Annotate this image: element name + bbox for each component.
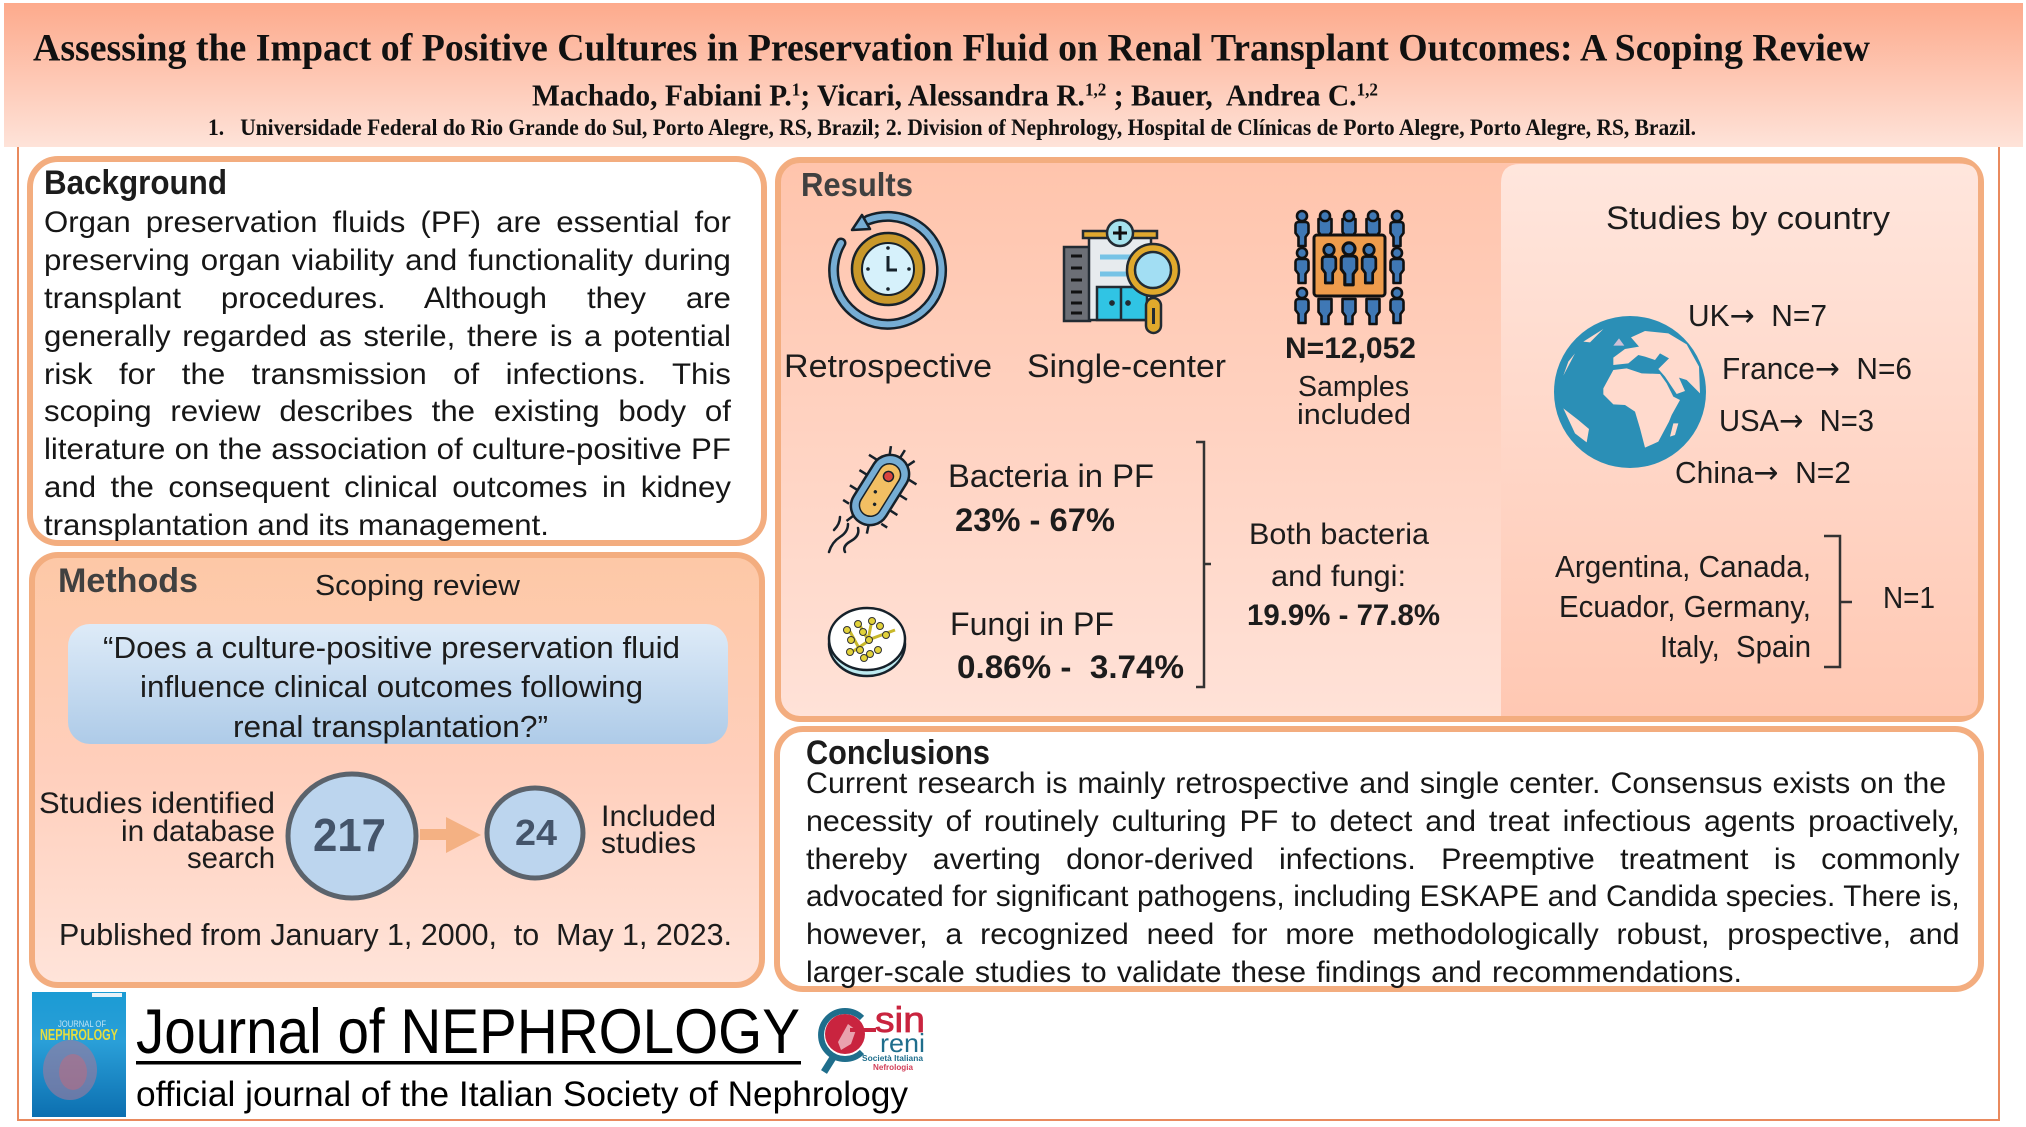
heading: conclusions: Conclusions — [806, 734, 990, 772]
journal cover — [32, 992, 126, 1117]
list: other countries — [1555, 549, 1811, 664]
authors: 1,2 — [1357, 80, 1378, 100]
stat: samples included — [1285, 332, 1416, 431]
label: fungi: 0.86% - 3.74% — [957, 649, 1184, 685]
journal subtitle: official journal of the Italian Society of Nephrology — [136, 1075, 908, 1114]
label: studies identified — [39, 787, 275, 875]
text block: conclusions: necessity of routinely culturing PF to detect and treat infectious agents proactively, — [806, 805, 1960, 838]
label: included studies — [601, 800, 716, 860]
text block: conclusions: advocated for significant pathogens, including ESKAPE and Candida species. There is, — [806, 880, 1960, 913]
title: Assessing the Impact of Positive Cultures in Preservation Fluid on Renal Transplant Outcomes: A Scoping Review — [33, 26, 1870, 70]
panel: results — [778, 160, 1981, 719]
icon: retrospective clock — [834, 215, 942, 324]
journal cover: JOURNAL OF — [58, 1019, 106, 1029]
text block: conclusions — [806, 765, 1976, 1005]
icon: globe — [1554, 316, 1706, 468]
logo: SIN Reni: reni — [880, 1028, 925, 1058]
authors: Machado, Fabiani P. — [532, 78, 805, 112]
text block: conclusions: however, a recognized need for more methodologically robust, prospective, and — [806, 918, 1960, 951]
label: bacteria — [948, 458, 1154, 538]
icon: people samples — [1296, 211, 1404, 324]
list: top countries: China→ N=2 — [1675, 455, 1851, 491]
label: included studies: studies — [601, 827, 696, 860]
logo: SIN Reni: sin — [875, 999, 925, 1040]
circle: 24 — [487, 788, 583, 878]
callout: research question: influence clinical outcomes following — [140, 669, 643, 704]
text block: conclusions: larger-scale studies to validate these findings and recommendations. — [806, 956, 1742, 989]
label: retrospective: Retrospective — [784, 348, 992, 384]
header banner — [4, 3, 2023, 147]
arrow — [420, 817, 481, 853]
text block: background: risk for the transmission of infections. This — [44, 358, 731, 390]
authors: 1 — [792, 80, 800, 100]
authors: ; Vicari, Alessandra R. — [800, 78, 1085, 112]
label: fungi: Fungi in PF — [950, 606, 1114, 642]
bracket: bacteria and fungi — [1196, 442, 1211, 687]
panel: studies by country — [1501, 164, 1978, 716]
heading: results: Results — [801, 166, 913, 203]
authors: ; Bauer, Andrea C. — [1106, 78, 1357, 112]
callout: research question: renal transplantation?” — [233, 709, 548, 744]
label: fungi — [950, 606, 1184, 685]
label: studies identified: Studies identified — [39, 787, 275, 820]
stat: samples included: included — [1297, 399, 1411, 431]
authors: 1,2 — [1085, 80, 1106, 100]
stat: both bacteria and fungi: Both bacteria — [1249, 518, 1429, 551]
logo: SIN Reni: Nefrologia — [873, 1063, 914, 1072]
label: studies identified: in database — [121, 815, 275, 848]
panel: conclusions — [777, 729, 1981, 1005]
journal cover: NEPHROLOGY — [40, 1027, 118, 1044]
stat: samples included: Samples — [1298, 371, 1409, 403]
logo: SIN Reni: Società Italiana — [862, 1054, 924, 1063]
label: bacteria: Bacteria in PF — [948, 458, 1154, 494]
text block: background: generally regarded as sterile, there is a potential — [44, 320, 731, 353]
list: other countries: Ecuador, Germany, — [1559, 589, 1811, 624]
list: top countries: France→ N=6 — [1722, 351, 1912, 387]
label: bacteria: 23% - 67% — [955, 502, 1115, 538]
label: N=1: N=1 — [1883, 580, 1935, 615]
logo: SIN Reni — [821, 999, 925, 1072]
list: top countries: USA→ N=3 — [1719, 403, 1874, 439]
journal name: Journal of NEPHROLOGY — [136, 997, 800, 1067]
text block: conclusions: Current research is mainly retrospective and single center. Consensus exists on the — [806, 767, 1946, 800]
affiliations: 1. Universidade Federal do Rio Grande do Sul, Porto Alegre, RS, Brazil; 2. Division of Nephrology, Hospital de Clínicas de Porto Alegre, Porto Alegre, RS, Brazil. — [208, 115, 1696, 140]
panel: methods — [32, 555, 762, 985]
text block: background: and the consequent clinical outcomes in kidney — [44, 471, 731, 504]
stat: samples included: N=12,052 — [1285, 332, 1416, 365]
icon: single-center hospital — [1064, 220, 1179, 333]
text block: background: transplant procedures. Although they are — [44, 282, 731, 315]
list: other countries: Italy, Spain — [1660, 629, 1811, 664]
bracket: other countries — [1824, 536, 1852, 667]
text block: background: transplantation and its management. — [44, 509, 549, 542]
text block: background: scoping review describes the existing body of — [44, 395, 731, 428]
text: publication dates: Published from January 1, 2000, to May 1, 2023. — [59, 917, 732, 952]
icon: bacteria — [829, 435, 929, 552]
list: other countries: Argentina, Canada, — [1555, 549, 1811, 584]
stat: both bacteria and fungi — [1247, 518, 1440, 632]
circle: 217 — [288, 774, 416, 898]
heading: studies by country: Studies by country — [1606, 200, 1890, 236]
list: top countries: UK→ N=7 — [1688, 298, 1827, 334]
heading: background: Background — [44, 164, 227, 202]
text block: background: literature on the association of culture-positive PF — [44, 433, 731, 466]
text block: background — [44, 204, 764, 554]
stat: both bacteria and fungi: and fungi: — [1271, 560, 1406, 593]
icon: fungi dish — [829, 608, 905, 676]
text block: conclusions: thereby averting donor-derived infections. Preemptive treatment is commonly — [806, 843, 1960, 876]
heading: methods: Methods — [58, 562, 198, 600]
circle: 24: 24 — [515, 812, 557, 853]
stat: both bacteria and fungi: 19.9% - 77.8% — [1247, 599, 1440, 632]
label: studies identified: search — [187, 842, 275, 875]
callout: research question: “Does a culture-positive preservation fluid — [103, 630, 680, 665]
text block: background: preserving organ viability and functionality during — [44, 244, 731, 277]
label: scoping review: Scoping review — [315, 570, 521, 602]
callout: research question — [68, 624, 728, 744]
list: top countries — [1675, 298, 1912, 491]
panel: background — [30, 159, 764, 554]
text block: background: Organ preservation fluids (PF) are essential for — [44, 206, 731, 239]
circle: 217: 217 — [313, 809, 386, 861]
label: included studies: Included — [601, 800, 716, 833]
label: single-center: Single-center — [1027, 348, 1226, 384]
